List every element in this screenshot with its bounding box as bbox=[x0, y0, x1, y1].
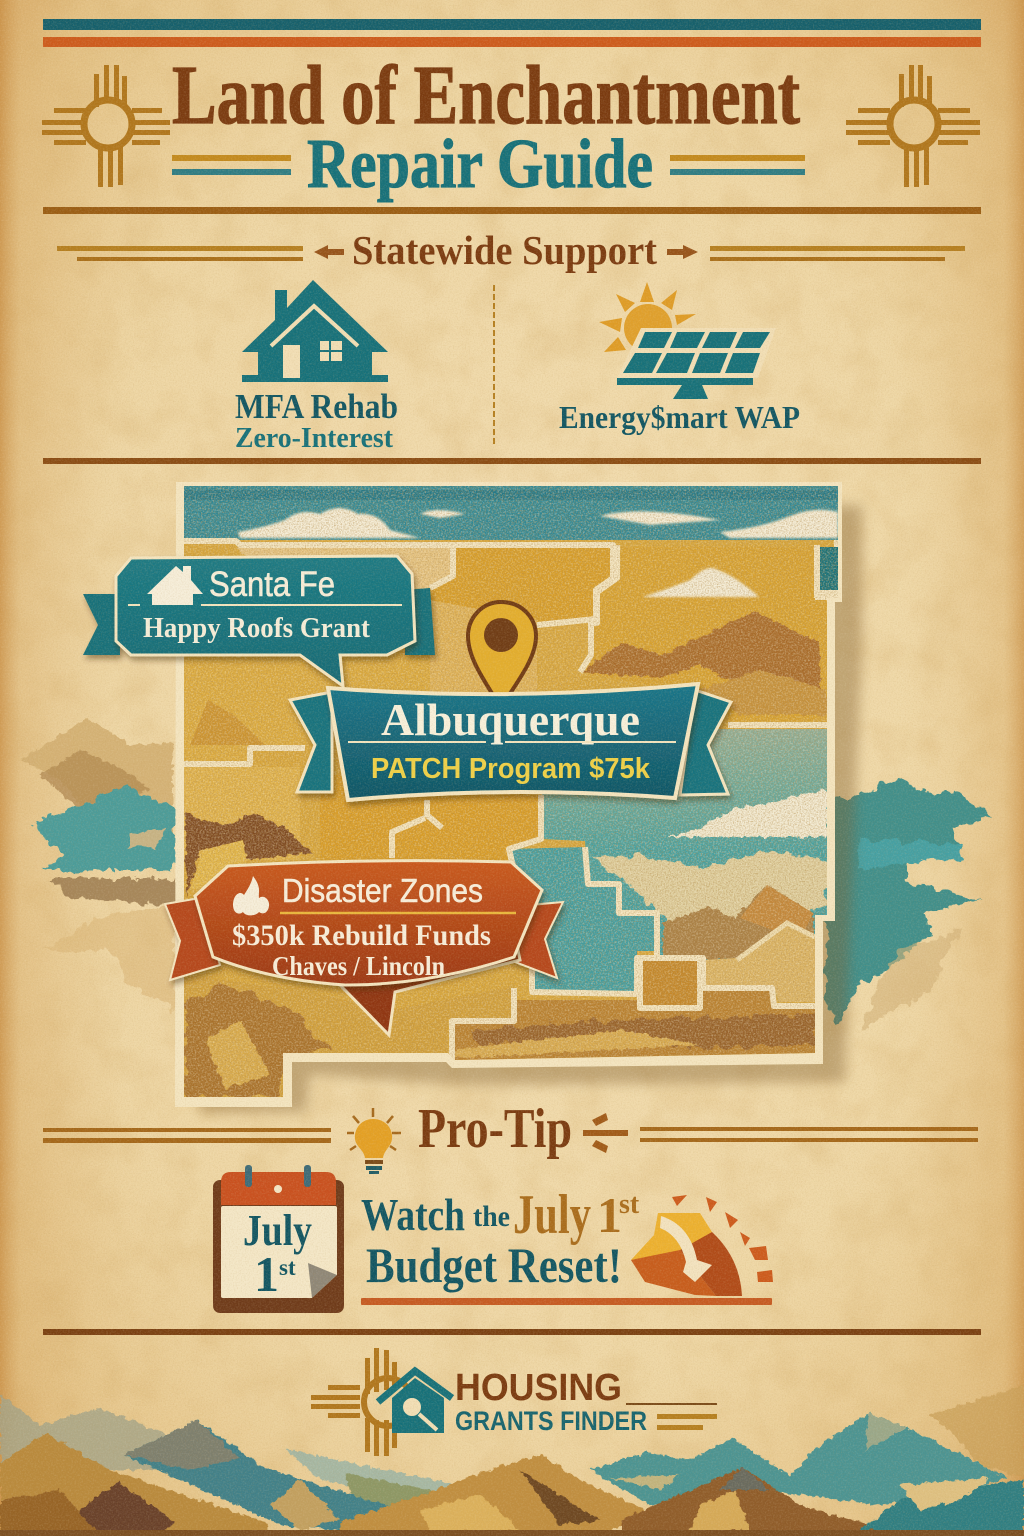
Albuquerque banner bbox=[290, 684, 731, 800]
zia sun right bbox=[846, 65, 980, 187]
region: sky band bbox=[184, 486, 838, 540]
icon: budget gauge bbox=[631, 1195, 773, 1296]
region: sandy north strip bbox=[236, 548, 450, 590]
region: east upper bbox=[542, 729, 827, 1002]
icon: white house bbox=[147, 566, 203, 605]
icon: house bbox=[242, 280, 388, 382]
label: MFA Rehab: Zero-Interest bbox=[235, 422, 393, 454]
footer logo: Housing Grants Finder: HOUSING bbox=[455, 1367, 622, 1409]
ribbon tails bbox=[83, 588, 435, 655]
banner body bbox=[328, 684, 698, 800]
Santa Fe banner bbox=[83, 556, 435, 686]
divider bbox=[43, 1329, 981, 1335]
label: Energy$mart WAP: Energy$mart WAP bbox=[559, 399, 800, 435]
background mountains right bbox=[825, 777, 990, 1030]
footer mountain landscape bbox=[0, 1385, 1024, 1536]
Disaster Zones banner bbox=[165, 861, 563, 1035]
underline bbox=[361, 1298, 772, 1305]
rebuild funds text: $350k Rebuild Funds bbox=[232, 919, 491, 952]
callout: budget reset text: Watch bbox=[361, 1189, 465, 1240]
region: southwest bbox=[184, 982, 332, 1097]
footer logo: Housing Grants Finder bbox=[311, 1348, 717, 1456]
region: square county bbox=[643, 961, 697, 1005]
top stripes bbox=[43, 19, 981, 47]
icon: calendar: 1 bbox=[254, 1246, 279, 1302]
heading: Pro-Tip bbox=[43, 1098, 978, 1174]
subtitle: Repair Guide bbox=[307, 126, 653, 203]
callout: budget reset text bbox=[361, 1184, 640, 1293]
banner body bbox=[116, 556, 415, 686]
icon: calendar: st bbox=[279, 1255, 296, 1280]
logo zia bbox=[311, 1348, 412, 1456]
map of New Mexico bbox=[175, 480, 862, 1112]
ribbon tails bbox=[290, 690, 731, 795]
ribbon tails bbox=[165, 898, 563, 980]
location pin bbox=[468, 602, 536, 708]
heading: Pro-Tip: Pro-Tip bbox=[418, 1098, 572, 1160]
region: southeast strip bbox=[455, 990, 818, 1060]
heading: Statewide Support bbox=[57, 227, 965, 273]
region: small teal block bbox=[815, 547, 838, 600]
region: teal basin bbox=[509, 847, 657, 994]
icon: light bulb bbox=[347, 1108, 401, 1174]
background mountains left bbox=[20, 718, 175, 1010]
region: west central bbox=[184, 767, 312, 897]
banner rule bbox=[280, 912, 516, 914]
divider bbox=[43, 207, 981, 214]
region: northwest bbox=[190, 700, 264, 745]
vertical dashed divider bbox=[493, 285, 495, 447]
PATCH text: PATCH Program $75k bbox=[371, 753, 651, 785]
callout: budget reset text: 1 bbox=[597, 1187, 622, 1243]
region borders bbox=[184, 541, 830, 1060]
Albuquerque text: Albuquerque bbox=[381, 694, 640, 745]
callout: budget reset text: the bbox=[473, 1200, 510, 1233]
map shadow bbox=[200, 505, 862, 1112]
heading: Statewide Support: Statewide Support bbox=[352, 227, 657, 273]
label: MFA Rehab: MFA Rehab bbox=[235, 387, 398, 426]
icon: calendar bbox=[213, 1165, 344, 1313]
icon: solar panel with sun bbox=[599, 282, 776, 399]
footer logo: Housing Grants Finder: GRANTS FINDER bbox=[455, 1406, 647, 1436]
banner rule bbox=[348, 741, 676, 743]
callout: budget reset text: st bbox=[619, 1189, 640, 1220]
Santa Fe text: Santa Fe bbox=[209, 565, 335, 604]
map base bbox=[175, 482, 842, 1107]
region: northeast bbox=[580, 547, 827, 721]
region: north central bbox=[430, 547, 613, 700]
map grain bbox=[175, 480, 845, 1110]
callout: budget reset text: July bbox=[513, 1184, 591, 1246]
subtitle bbox=[172, 126, 805, 203]
banner back layer bbox=[230, 940, 520, 1035]
counties text: Chaves / Lincoln bbox=[272, 951, 445, 981]
pin centre bbox=[484, 618, 518, 652]
banner rule bbox=[128, 604, 402, 606]
zia sun left bbox=[42, 65, 170, 187]
callout: budget reset text: Budget Reset! bbox=[366, 1237, 622, 1293]
region: map base gold bbox=[184, 540, 834, 1060]
icon: calendar: July bbox=[243, 1206, 312, 1255]
divider bbox=[43, 458, 981, 464]
region: central bbox=[320, 775, 540, 866]
grant text: Happy Roofs Grant bbox=[143, 613, 371, 644]
Disaster Zones text: Disaster Zones bbox=[282, 872, 483, 909]
title: Land of Enchantment bbox=[172, 49, 800, 142]
label: MFA Rehab bbox=[235, 387, 398, 454]
logo house bbox=[392, 1378, 444, 1433]
icon: flames bbox=[233, 876, 269, 915]
banner body bbox=[195, 861, 542, 985]
